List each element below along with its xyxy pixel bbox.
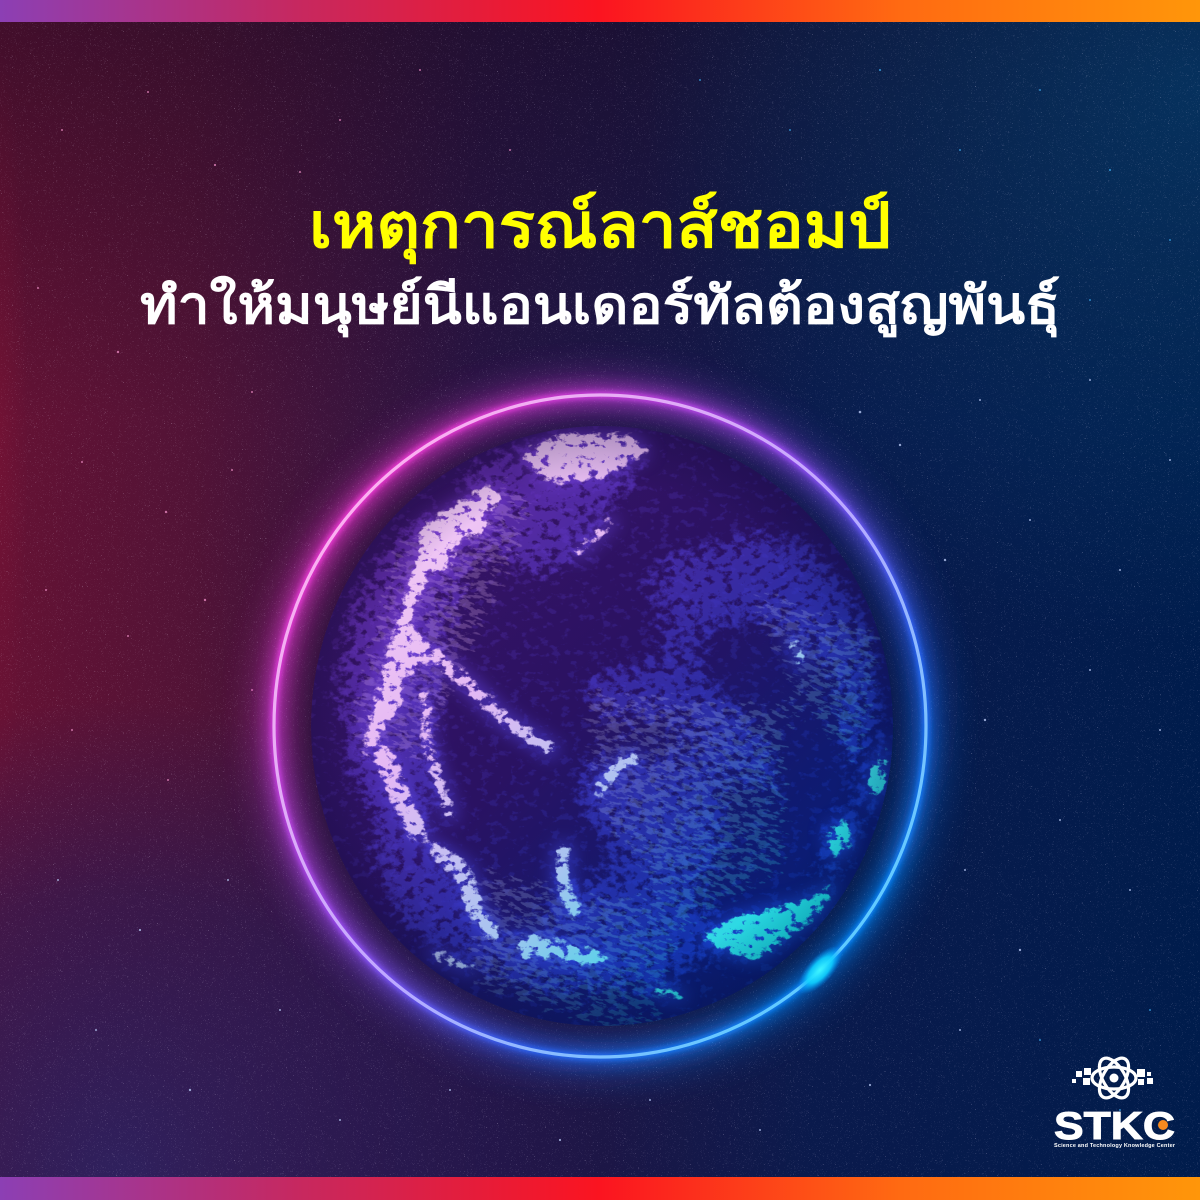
limb highlight at upper right	[668, 432, 850, 545]
logo orange dot	[1158, 1120, 1168, 1130]
icon: atom emblem	[1092, 1053, 1136, 1103]
icon: pixel squares	[1072, 1068, 1153, 1085]
subtitle: white heading: ทำให้มนุษย์นีแอนเดอร์ทัลต้องสูญพันธุ์	[140, 275, 1060, 338]
title: yellow heading: เหตุการณ์ลาส์ชอมป์	[309, 191, 891, 264]
STKC logo	[1054, 1053, 1176, 1149]
fine cloud streaks	[350, 477, 880, 1026]
neon ring around the earth	[274, 395, 926, 1057]
fine surface grain	[300, 415, 910, 1035]
logo tagline: Science and Technology Knowledge Center	[1054, 1143, 1176, 1149]
top gradient bar	[0, 0, 1200, 22]
bottom gradient bar	[0, 1177, 1200, 1200]
bright clouds	[360, 430, 889, 1000]
mid-tone land and cloud layer	[329, 438, 890, 1006]
earth globe	[300, 415, 910, 1035]
logotype: STKC	[1054, 1105, 1175, 1148]
cyan flare on the ring	[790, 939, 850, 1001]
soft cloud glow	[353, 426, 892, 1008]
